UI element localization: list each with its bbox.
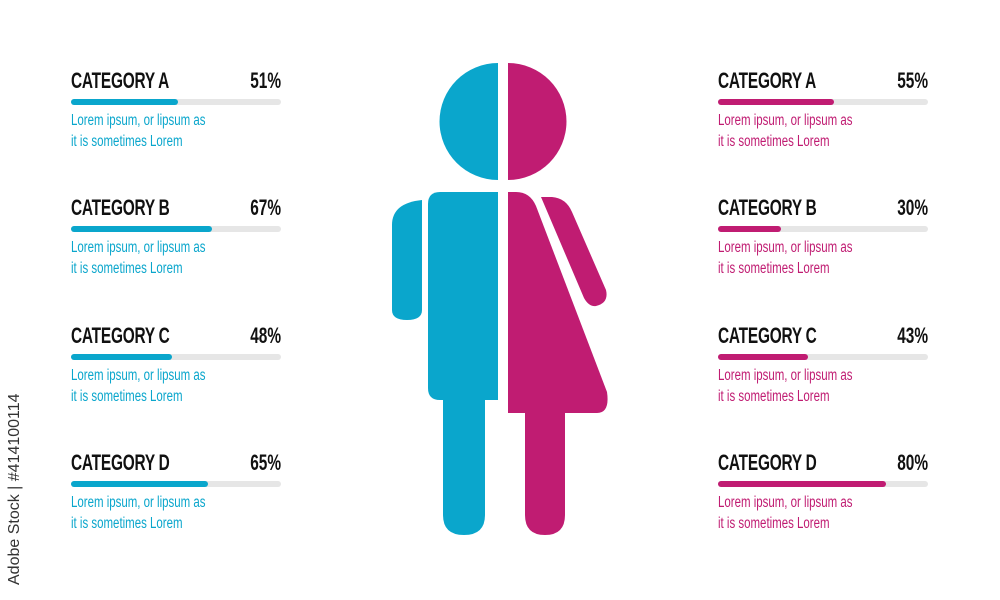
panel: left category C: it is sometimes Lorem <box>71 388 183 405</box>
panel: left category D: CATEGORY D <box>71 450 170 475</box>
panel: right category C: it is sometimes Lorem <box>718 388 830 405</box>
panel: right category B: it is sometimes Lorem <box>718 260 830 277</box>
panel: right category B: CATEGORY B <box>718 195 817 220</box>
panel: right category D <box>718 450 928 532</box>
panel: left category C: Lorem ipsum, or lipsum as <box>71 367 206 384</box>
panel: right category A: it is sometimes Lorem <box>718 133 830 150</box>
panel: left category B: Lorem ipsum, or lipsum as <box>71 239 206 256</box>
panel: right category C: Lorem ipsum, or lipsum as <box>718 367 853 384</box>
panel: right category C: 43% <box>897 323 928 348</box>
panel: left category B: it is sometimes Lorem <box>71 260 183 277</box>
panel: left category B <box>71 195 281 277</box>
panel: right category D: CATEGORY D <box>718 450 817 475</box>
panel: right category B <box>718 195 928 277</box>
panel: left category C: 48% <box>250 323 281 348</box>
panel: left category A: Lorem ipsum, or lipsum as <box>71 112 206 129</box>
icon: female half <box>508 63 608 535</box>
panel: right category D: it is sometimes Lorem <box>718 515 830 532</box>
panel: right category D: Lorem ipsum, or lipsum as <box>718 494 853 511</box>
panel: right category A: 55% <box>897 68 928 93</box>
panel: right category A: Lorem ipsum, or lipsum as <box>718 112 853 129</box>
panel: right category C: CATEGORY C <box>718 323 817 348</box>
panel: left category C: CATEGORY C <box>71 323 170 348</box>
watermark text: Adobe Stock | #414100114 <box>6 393 23 585</box>
panel: left category D: it is sometimes Lorem <box>71 515 183 532</box>
panel: left category D: 65% <box>250 450 281 475</box>
panel: right category C <box>718 323 928 405</box>
panel: right category B: Lorem ipsum, or lipsum as <box>718 239 853 256</box>
panel: left category D <box>71 450 281 532</box>
panel: left category B: 67% <box>250 195 281 220</box>
panel: right category A: CATEGORY A <box>718 68 816 93</box>
panel: left category A <box>71 68 281 150</box>
panel: left category D: Lorem ipsum, or lipsum as <box>71 494 206 511</box>
panel: left category A: 51% <box>250 68 281 93</box>
panel: left category C <box>71 323 281 405</box>
panel: left category B: CATEGORY B <box>71 195 170 220</box>
panel: left category A: CATEGORY A <box>71 68 169 93</box>
panel: right category D: 80% <box>897 450 928 475</box>
panel: right category A <box>718 68 928 150</box>
panel: right category B: 30% <box>897 195 928 220</box>
icon: male half <box>392 63 498 535</box>
panel: left category A: it is sometimes Lorem <box>71 133 183 150</box>
